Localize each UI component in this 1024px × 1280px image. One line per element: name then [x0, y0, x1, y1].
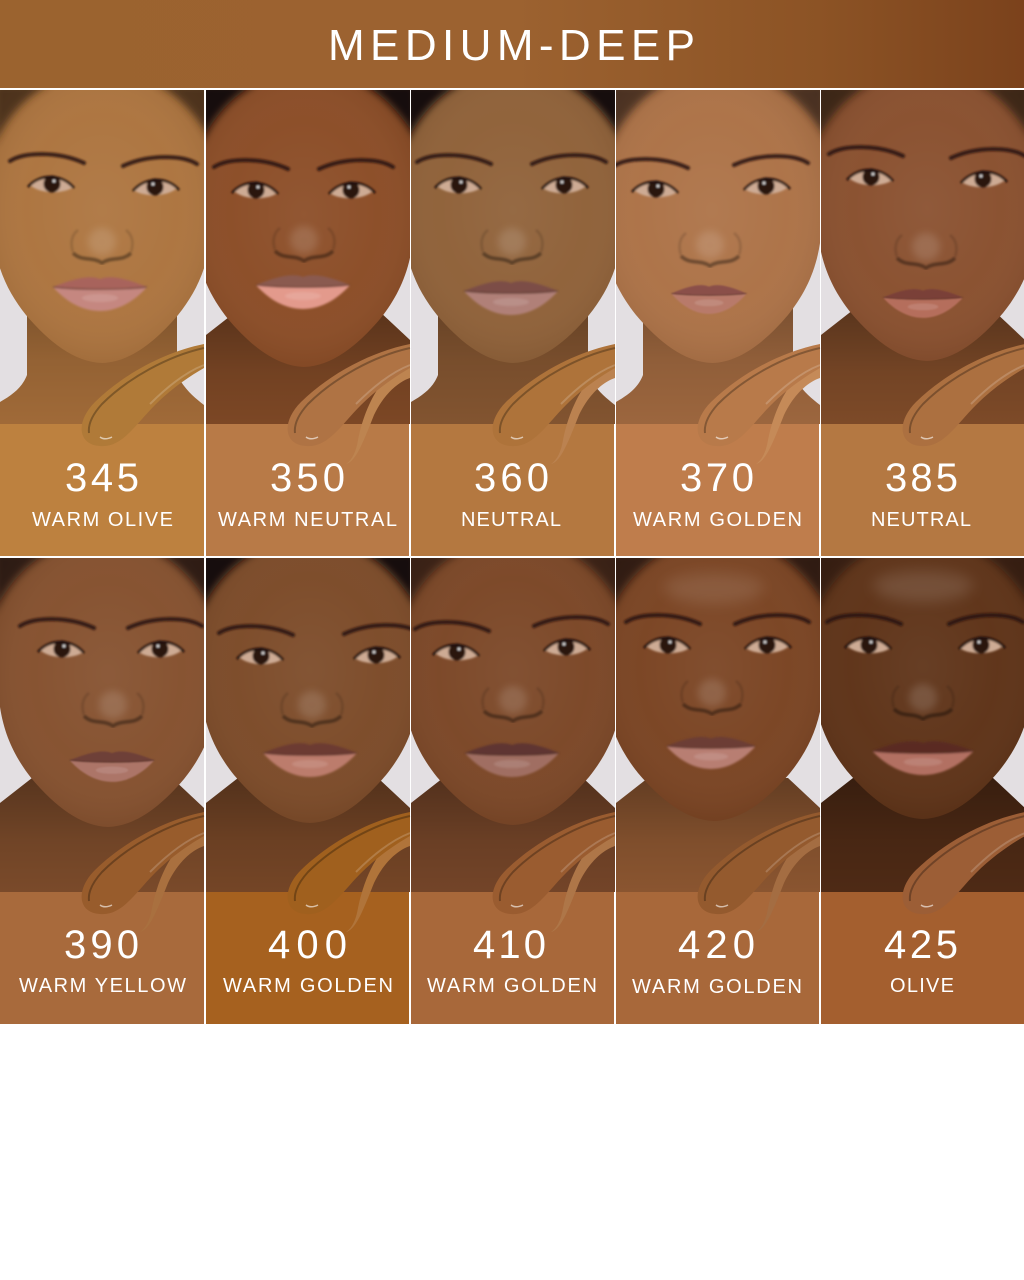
swatch 370 — [698, 344, 820, 464]
portrait 370 — [616, 90, 820, 424]
shade name 420: WARM GOLDEN — [632, 976, 802, 998]
label background 350 — [206, 424, 409, 556]
shade name 400: WARM GOLDEN — [223, 975, 393, 997]
panel: shade 420 — [616, 558, 820, 1024]
shade name 390: WARM YELLOW — [19, 975, 186, 997]
swatch 350 — [288, 344, 410, 464]
portrait 385 — [815, 83, 1024, 424]
panel: shade 385 — [815, 83, 1024, 556]
number 360: 360 — [474, 456, 549, 500]
number 400: 400 — [268, 923, 347, 967]
swatch 425 — [903, 812, 1024, 914]
panel: shade 390 — [0, 549, 218, 1024]
number 390: 390 — [64, 923, 139, 967]
panel: shade 350 — [194, 84, 416, 556]
label background 390 — [0, 892, 204, 1024]
portrait 410 — [411, 558, 615, 892]
swatch 410 — [493, 812, 615, 932]
title: MEDIUM-DEEP — [328, 21, 695, 70]
label background 400 — [206, 892, 409, 1024]
label background 425 — [821, 892, 1024, 1024]
panel: shade 400 — [200, 545, 420, 1024]
portrait 360 — [403, 84, 623, 424]
label background 385 — [821, 424, 1024, 556]
shade name 350: WARM NEUTRAL — [218, 509, 397, 531]
number 425: 425 — [884, 923, 958, 967]
swatch 360 — [493, 344, 615, 464]
panel: shade 370 — [602, 84, 826, 556]
portrait 400 — [206, 558, 410, 892]
header banner — [0, 0, 1024, 88]
portrait 425 — [813, 541, 1024, 892]
portrait 420 — [616, 558, 820, 892]
label background 360 — [411, 424, 614, 556]
number 370: 370 — [680, 456, 754, 500]
shade name 385: NEUTRAL — [871, 509, 971, 531]
panel: shade 345 — [0, 84, 212, 556]
label background 370 — [616, 424, 819, 556]
panel: shade 410 — [403, 547, 623, 1024]
number 385: 385 — [885, 456, 958, 500]
panel: shade 360 — [403, 84, 623, 556]
number 350: 350 — [270, 456, 345, 500]
swatch 345 — [82, 344, 204, 446]
swatch 420 — [698, 812, 820, 932]
panel: shade 425 — [813, 541, 1024, 1024]
shade name 345: WARM OLIVE — [32, 509, 173, 531]
portrait 350 — [194, 84, 416, 424]
label background 345 — [0, 424, 204, 556]
swatch 390 — [82, 812, 204, 932]
shade name 360: NEUTRAL — [461, 509, 561, 531]
shade name 410: WARM GOLDEN — [427, 975, 597, 997]
portrait 390 — [0, 549, 218, 892]
shade name 425: OLIVE — [890, 975, 954, 997]
label background 420 — [616, 892, 819, 1024]
portrait 345 — [0, 84, 212, 424]
number 345: 345 — [65, 456, 139, 500]
number 420: 420 — [678, 923, 755, 967]
number 410: 410 — [473, 923, 546, 967]
label background 410 — [411, 892, 614, 1024]
shade name 370: WARM GOLDEN — [633, 509, 802, 531]
swatch 400 — [288, 812, 410, 932]
swatch 385 — [903, 344, 1024, 446]
